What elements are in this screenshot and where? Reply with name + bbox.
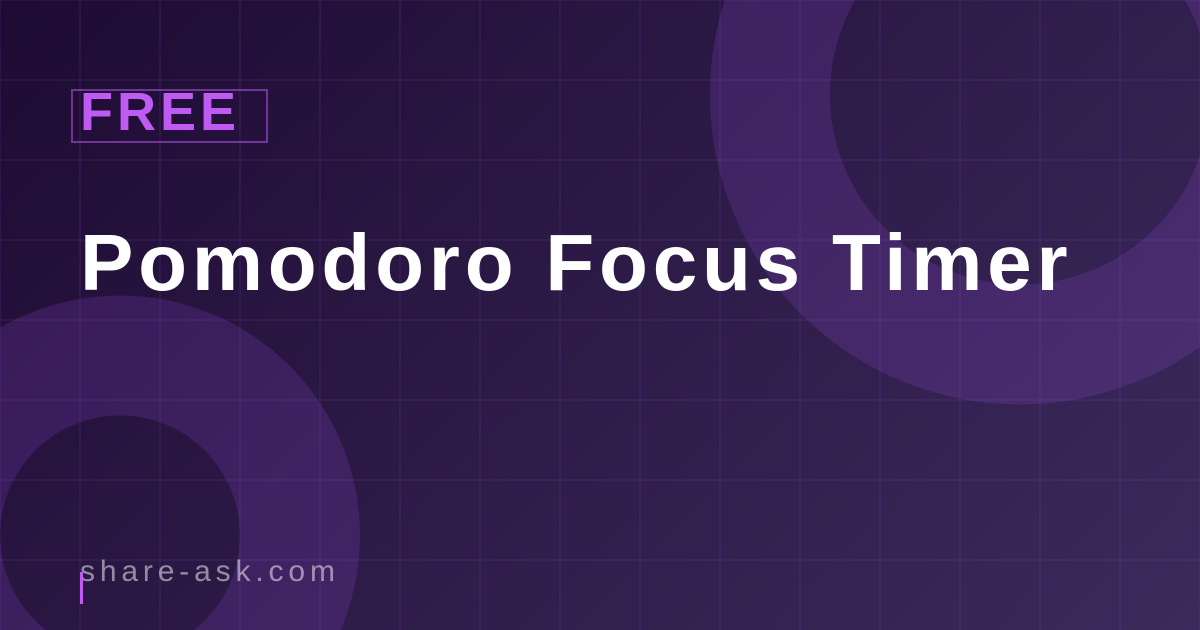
title: Pomodoro Focus Timer bbox=[80, 218, 1072, 307]
badge text: FREE bbox=[80, 82, 240, 142]
decorative ring: bottom left bbox=[0, 296, 360, 630]
accent bar bbox=[80, 572, 83, 604]
badge: FREE bbox=[71, 89, 268, 143]
domain: share-ask.com bbox=[80, 555, 340, 588]
decorative ring: top right bbox=[770, 0, 1200, 344]
